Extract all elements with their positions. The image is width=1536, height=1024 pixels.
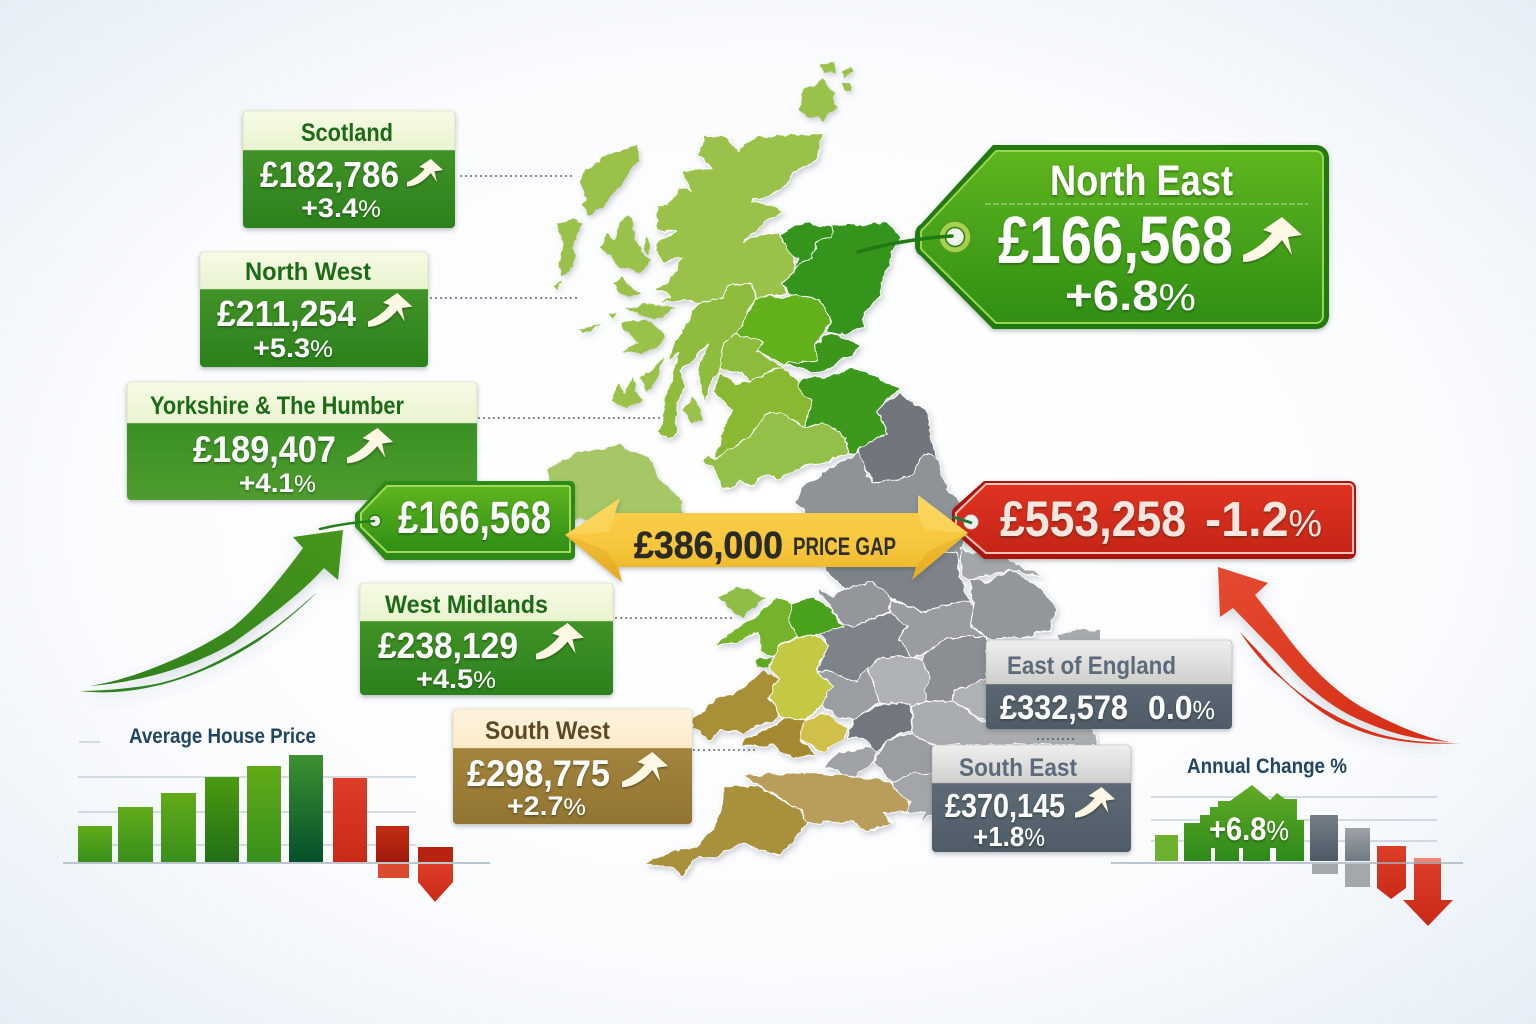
map region: Ayrshire xyxy=(713,367,812,460)
map region: Nottinghamshire xyxy=(890,600,987,657)
tag: highest price: -1.2% xyxy=(1205,493,1322,547)
tag: highest price xyxy=(952,481,1356,559)
label: Scotland xyxy=(243,111,455,228)
tag hole xyxy=(964,515,978,529)
label: West Midlands: +4.5% xyxy=(416,664,496,694)
label: Scotland: +3.4% xyxy=(301,193,381,223)
label: South West: £298,775 xyxy=(467,753,610,794)
label: South East: South East xyxy=(959,754,1078,782)
label: South West: +2.7% xyxy=(507,791,586,821)
map region: South Wales xyxy=(743,717,817,758)
label: South West: South West xyxy=(485,717,611,745)
map region: Perthshire xyxy=(737,295,830,363)
label: West Midlands xyxy=(360,583,613,695)
map region: Yorkshire xyxy=(825,540,970,612)
green curved arrow xyxy=(80,530,343,692)
label: North West: £211,254 xyxy=(217,293,356,334)
map region: Norfolk coast xyxy=(1057,630,1132,660)
chart bars xyxy=(78,755,453,902)
chart title: Annual Change % xyxy=(1187,755,1347,778)
map region: East Riding xyxy=(960,550,1045,580)
map region: West Wales xyxy=(693,670,778,740)
map region: Mid Wales fragment xyxy=(755,658,773,667)
tag string xyxy=(953,517,972,523)
map region: Anglesey xyxy=(717,587,765,617)
label: Scotland: £182,786 xyxy=(260,154,399,195)
map region: Northern England xyxy=(795,453,965,600)
label: East of England xyxy=(986,640,1232,729)
label: East of England: 0.0% xyxy=(1148,689,1215,726)
label: South East: +1.8% xyxy=(973,821,1045,852)
map region: Mid Wales xyxy=(768,635,832,720)
label: East of England: £332,578 xyxy=(1000,689,1128,727)
price gap double arrow: £386,000 xyxy=(634,525,783,567)
map region: Sussex xyxy=(890,773,940,823)
map region: Northamptonshire xyxy=(867,657,930,705)
map region: Scottish Highlands xyxy=(655,133,822,303)
map region: Warwickshire xyxy=(817,667,878,720)
map region: Argyll xyxy=(657,283,757,440)
chart: Annual Change xyxy=(1111,755,1463,926)
map region: Northumberland xyxy=(860,393,937,483)
tag string xyxy=(320,521,374,529)
label: West Midlands: £238,129 xyxy=(378,625,518,666)
chart title: Average House Price xyxy=(129,725,316,748)
tag: North East: North East xyxy=(1050,157,1233,205)
map region: Staffordshire xyxy=(817,613,913,682)
label: Yorkshire and The Humber xyxy=(127,382,477,500)
price gap double arrow xyxy=(565,495,968,582)
tag: highest price: £553,258 xyxy=(1000,491,1186,547)
map region: Dumfries and Galloway xyxy=(703,413,847,490)
map region: Central Belt xyxy=(722,333,783,383)
tag: North East: £166,568 xyxy=(998,203,1233,278)
map region: Cambridgeshire xyxy=(923,637,987,703)
chart value: +6.8% xyxy=(1209,811,1289,847)
red curved arrow xyxy=(1218,567,1460,744)
tag: lowest price xyxy=(320,481,575,560)
label: South West xyxy=(453,709,692,824)
map of the United Kingdom xyxy=(547,62,1132,877)
tag: North East xyxy=(858,145,1329,329)
map region: Northern Ireland xyxy=(547,445,685,530)
label: Yorkshire and The Humber: Yorkshire & The Humber xyxy=(150,392,404,420)
map region: Oxfordshire xyxy=(847,703,912,752)
label: Scotland: Scotland xyxy=(301,119,393,147)
map region: Scottish Borders xyxy=(797,368,900,455)
map region: Grampian and Angus xyxy=(780,222,902,335)
map region: North Wales xyxy=(713,597,797,658)
map region: Norfolk and Suffolk xyxy=(952,670,1010,725)
map region: Hertfordshire xyxy=(912,700,1100,745)
map region: Cheshire xyxy=(817,582,892,627)
tag: North East: +6.8% xyxy=(1065,272,1196,320)
label: West Midlands: West Midlands xyxy=(385,591,548,619)
price gap double arrow: PRICE GAP xyxy=(793,533,896,561)
map region: North East Wales xyxy=(790,597,843,638)
label: North West: +5.3% xyxy=(253,333,333,363)
label: North West: North West xyxy=(245,258,372,286)
label: Yorkshire and The Humber: +4.1% xyxy=(239,468,316,498)
map region: Fife xyxy=(783,335,862,372)
map region: Scottish islands xyxy=(553,62,853,423)
map region: Lincolnshire xyxy=(970,570,1057,638)
map region: Wiltshire xyxy=(825,747,877,780)
label: South East xyxy=(932,745,1131,852)
chart: Average House Price xyxy=(63,725,490,902)
map region: Hampshire xyxy=(873,733,940,783)
tag string xyxy=(858,236,952,252)
label: South East: £370,145 xyxy=(945,787,1065,824)
map region: Somerset and Dorset xyxy=(743,773,908,832)
label: North West xyxy=(200,252,428,367)
chart bars xyxy=(1155,785,1453,926)
leader lines xyxy=(430,176,1075,750)
tag hole xyxy=(939,221,971,253)
tag hole xyxy=(369,515,381,527)
map region: Gwent xyxy=(800,712,848,752)
map region: Devon and Cornwall xyxy=(645,785,807,877)
label: East of England: East of England xyxy=(1007,652,1176,680)
tag: lowest price: £166,568 xyxy=(398,492,551,543)
label: Yorkshire and The Humber: £189,407 xyxy=(193,429,336,470)
